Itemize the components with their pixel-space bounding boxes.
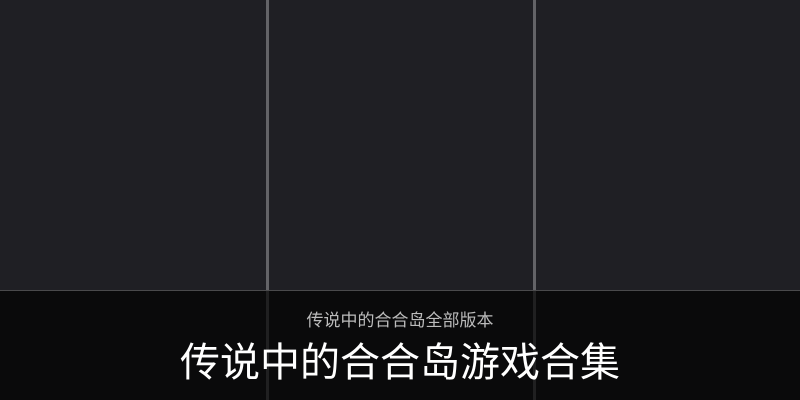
title: 传说中的合合岛游戏合集 — [180, 341, 620, 385]
subtitle: 传说中的合合岛全部版本 — [306, 311, 494, 330]
panel: left image placeholder — [0, 0, 266, 400]
divider: left — [266, 0, 269, 400]
panel: middle image placeholder — [269, 0, 533, 400]
caption band — [0, 290, 800, 400]
panel: right image placeholder — [536, 0, 800, 400]
divider: right — [533, 0, 536, 400]
